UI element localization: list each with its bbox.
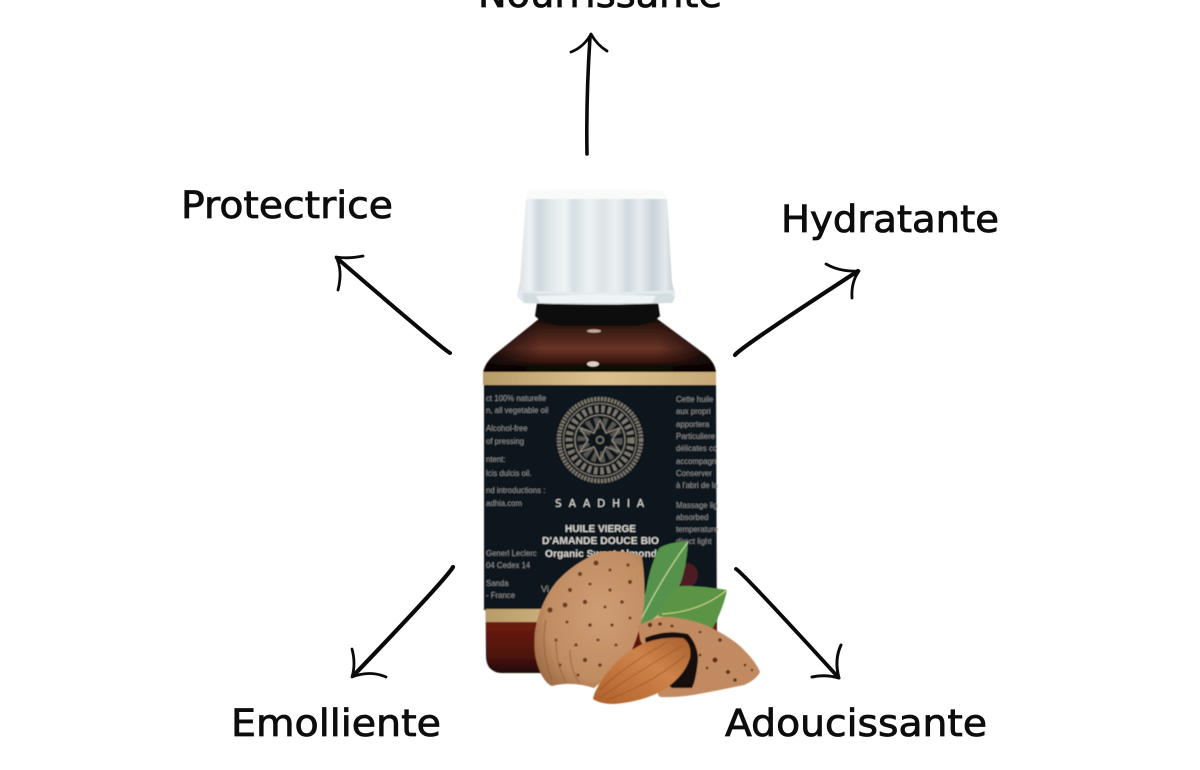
almonds and leaves (534, 541, 760, 704)
label right text: Cette huile (676, 395, 713, 404)
label right text: à l'abri de la (676, 481, 718, 490)
label left text: - France (486, 591, 515, 600)
label: Emolliente: Emolliente (231, 701, 441, 745)
product: bottle of sweet almond oil (483, 189, 718, 673)
label: Adoucissante: Adoucissante (725, 701, 987, 745)
label right text: Massage lig (676, 501, 718, 510)
bottle body (484, 372, 717, 672)
label left text: adhia.com (486, 499, 522, 508)
label right text: temperature (676, 525, 718, 534)
label left text: ntent: (486, 455, 506, 464)
almond kernel (593, 638, 690, 704)
label left text: of pressing (486, 437, 524, 446)
label left text: Alcohol-free (486, 424, 528, 433)
gold band top (483, 372, 716, 385)
label left text: Generl Leclerc (486, 549, 537, 558)
product name: HUILE VIERGE (565, 523, 636, 535)
cracked half shell (638, 617, 760, 697)
arrow: down-left to Emolliente (352, 567, 453, 677)
bottle cap (517, 189, 675, 304)
label left text: nd introductions : (486, 486, 545, 495)
product name: Organic Sweet Almond (545, 548, 657, 560)
label right text: Conserver (676, 469, 712, 478)
bottle shoulder (483, 318, 716, 374)
gold band bottom (486, 609, 716, 622)
arrow: up-right to Hydratante (735, 264, 859, 355)
label emblem: mandala (559, 399, 641, 481)
arrow: up to Nourrissante (571, 34, 607, 154)
label: volume mark: Vi (541, 584, 549, 594)
bottle neck (535, 303, 660, 326)
label right text: Particuliere (676, 432, 715, 441)
label left text: 04 Cedex 14 (486, 561, 531, 570)
whole almond shell (534, 551, 645, 688)
amber base (486, 622, 716, 673)
leaf: right (658, 586, 727, 628)
label right text: aux propri (676, 407, 711, 416)
brand name: SAADHIA (555, 498, 645, 510)
arrow: up-left to Protectrice (336, 256, 450, 353)
label: Hydratante: Hydratante (781, 197, 999, 241)
label right text (676, 395, 718, 546)
label right text: direct light (676, 537, 712, 546)
label right text: délicates co (676, 444, 718, 453)
label left text: n, all vegetable oil (486, 406, 549, 415)
label right text: apportera (676, 420, 710, 429)
product name: D'AMANDE DOUCE BIO (542, 535, 659, 547)
label right text: absorbed (676, 513, 709, 522)
black label (484, 385, 716, 610)
label: Protectrice: Protectrice (181, 183, 393, 227)
product name (542, 523, 659, 560)
arrow: down-right to Adoucissante (736, 569, 841, 678)
label left text: Sanda (486, 579, 509, 588)
red seal (676, 563, 698, 587)
label left text: lcis dulcis oil. (486, 469, 532, 478)
leaf: upright (633, 541, 688, 634)
label left text (486, 394, 549, 600)
label left text: ct 100% naturelle (486, 394, 546, 403)
label right text: accompagn (676, 457, 716, 466)
